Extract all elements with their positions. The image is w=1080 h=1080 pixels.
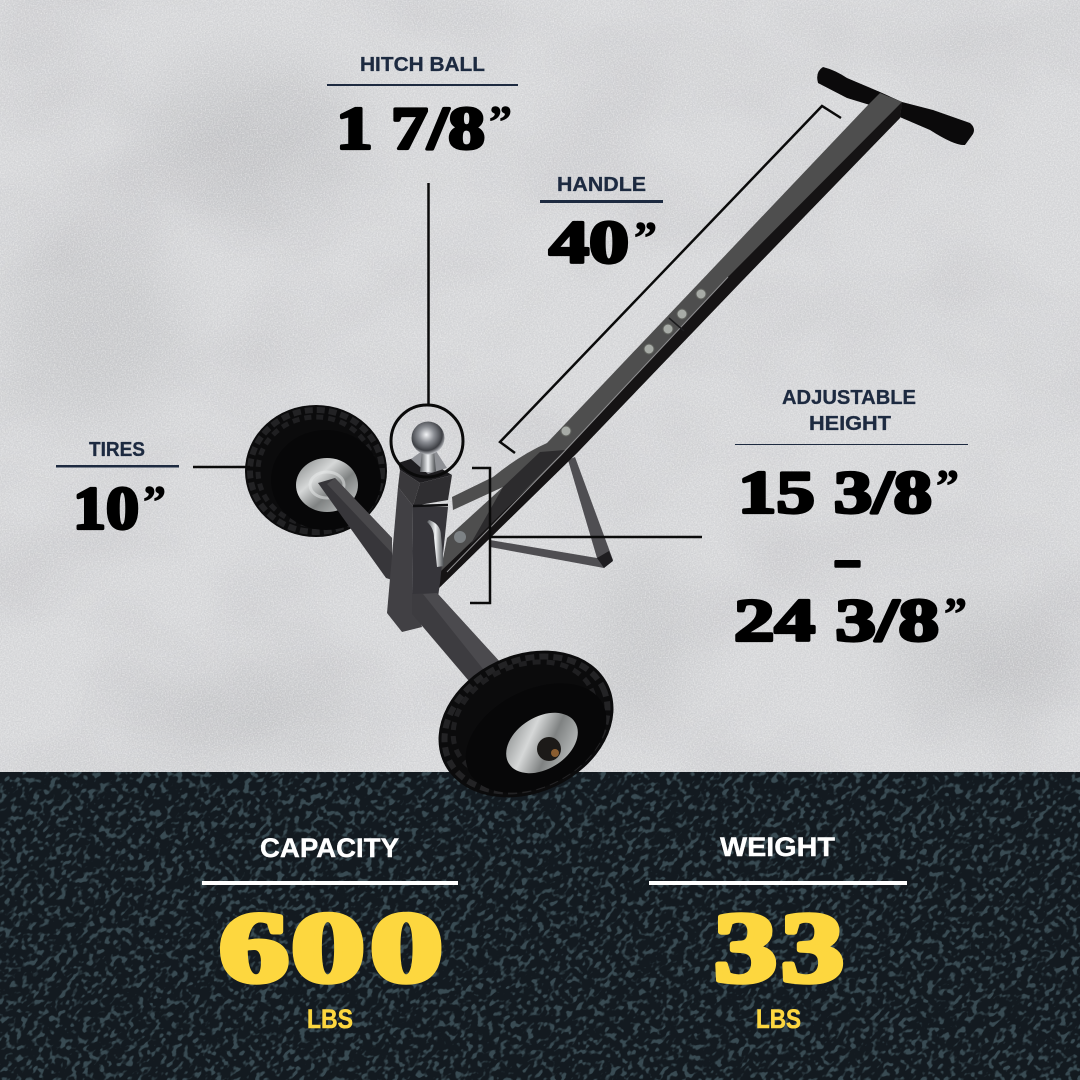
stat: weight: 3 <box>714 892 777 1003</box>
kickstand <box>490 457 613 568</box>
callout: handle: HANDLE <box>557 174 646 196</box>
stat: capacity: 0 <box>370 892 443 1003</box>
callout: adjustable height: ” <box>944 588 967 639</box>
callout: adjustable height: ADJUSTABLE <box>782 387 916 409</box>
callout: hitch ball: 1 7/8 <box>336 96 485 162</box>
handle tube <box>437 93 902 590</box>
background: concrete texture <box>0 0 1080 772</box>
stat: weight: 3 <box>781 892 844 1003</box>
stat: weight <box>649 832 907 1034</box>
callout: adjustable height: ” <box>936 460 959 511</box>
front wheel <box>414 623 638 825</box>
lower axle <box>412 593 500 687</box>
callout: tires <box>56 439 250 542</box>
product photo: trailer dolly <box>245 67 974 825</box>
callout: hitch ball: HITCH BALL <box>360 54 485 76</box>
stat: capacity: CAPACITY <box>260 833 399 863</box>
callout: adjustable height: HEIGHT <box>809 413 891 435</box>
callout: tires: 10 <box>73 476 139 542</box>
rear wheel <box>245 405 387 537</box>
hitch ball <box>411 422 447 474</box>
hitch post <box>387 422 466 632</box>
callout: adjustable height: 15 3/8 <box>738 460 932 526</box>
handle bolts <box>561 289 706 436</box>
callout: handle: 40 <box>549 210 629 276</box>
stat: weight: LBS <box>756 1004 801 1034</box>
callout: adjustable height: 24 3/8 <box>734 588 939 654</box>
T-grip <box>817 67 974 145</box>
hitch pin <box>427 520 444 567</box>
callout: handle: ” <box>634 212 657 263</box>
stat: capacity: 0 <box>291 892 365 1003</box>
callout: tires: TIRES <box>89 439 145 461</box>
stat: capacity: LBS <box>307 1004 353 1034</box>
callout: adjustable height: – <box>835 525 860 591</box>
callout: handle <box>500 106 841 453</box>
stat: capacity: 6 <box>219 892 289 1003</box>
background: dark leather band <box>0 772 1080 1080</box>
axle <box>318 478 392 580</box>
callout: hitch ball: ” <box>489 96 512 147</box>
callout: tires: ” <box>143 476 166 527</box>
callout: adjustable height <box>470 387 968 654</box>
hitch bolt <box>454 531 466 543</box>
stat: capacity <box>202 833 458 1034</box>
stat: weight: WEIGHT <box>720 832 836 862</box>
callout: hitch ball <box>327 54 518 477</box>
